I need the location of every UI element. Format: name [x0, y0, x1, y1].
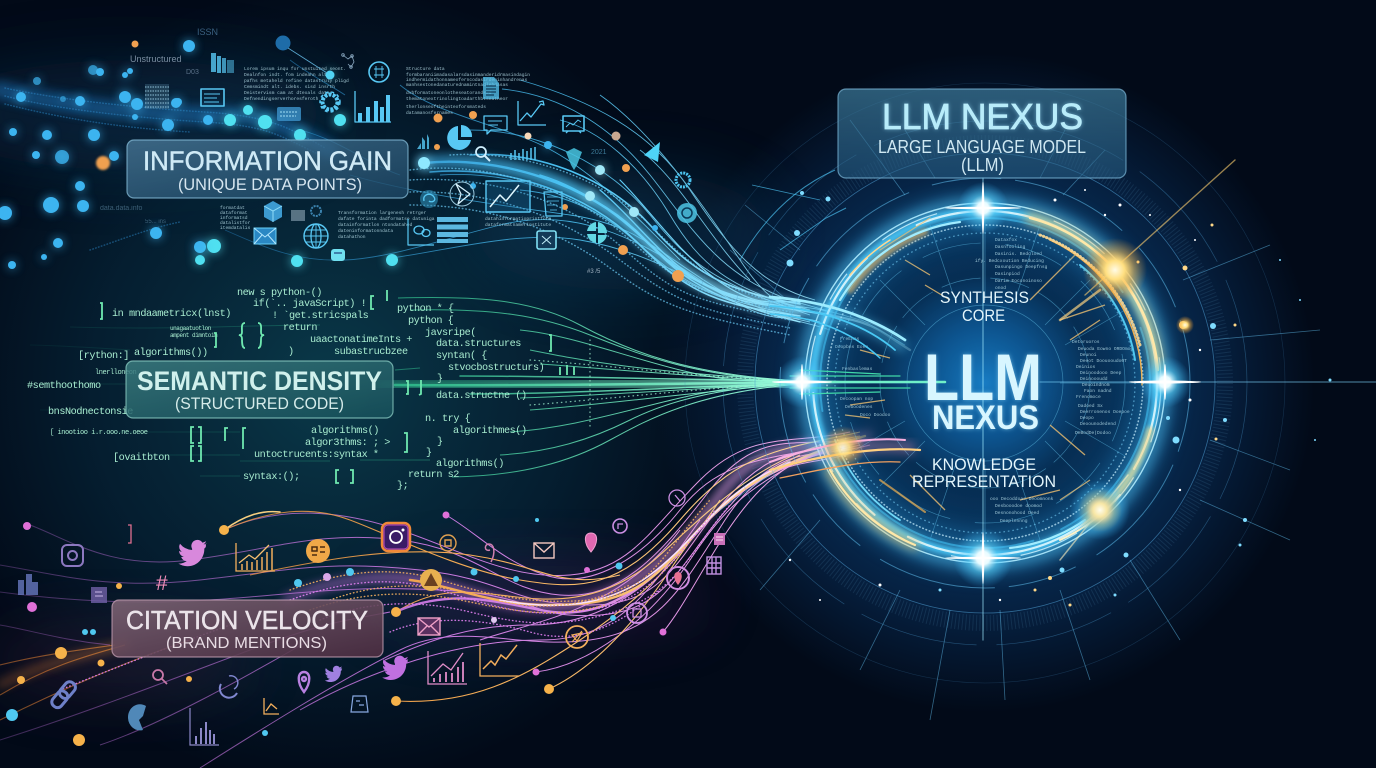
- nexus: inner micro data: Fenbaslemas: [842, 366, 873, 372]
- nexus: inner gold streaks: [845, 255, 1105, 510]
- code fragments: in mndaametricx(lnst): [112, 308, 231, 320]
- icon: column chart: [211, 53, 234, 73]
- icons: citation cluster: [18, 490, 725, 745]
- icon: orange ring: [566, 626, 588, 648]
- information gain text blocks: Cemsmindt alt. idebs. sisd insrth: [244, 84, 335, 90]
- information gain text blocks: datainformatlon ntondatahed: [338, 222, 413, 228]
- nexus: inner micro data: Deoounodedend: [1080, 421, 1116, 427]
- information gain text blocks: dvbformatoneonlotheseatorandsed: [406, 90, 492, 96]
- icon: document: [483, 77, 499, 99]
- label: llm core title: NEXUS: [932, 399, 1039, 437]
- information gain micro labels: 55... ins: [145, 219, 166, 225]
- nexus: inner micro data: Dadoed Sx: [1078, 403, 1103, 409]
- icon: mini bars left: [417, 134, 429, 149]
- icon: blue bullet: [128, 704, 146, 730]
- icon: twitter bird: [178, 540, 207, 566]
- nexus: inner micro data: Doopbns Eoen: [835, 344, 868, 350]
- heading: semantic density: SEMANTIC DENSITY: [137, 366, 382, 396]
- subheading: unique data points: (UNIQUE DATA POINTS): [178, 175, 362, 194]
- nexus: flare stars: [772, 182, 1201, 588]
- icon: small bar chart: [190, 708, 219, 745]
- information gain text blocks: indhermidathonnameoferncodasirdeninhandrenas: [406, 77, 528, 83]
- nexus: inner micro data: Darim Eoconoinoso: [995, 278, 1042, 284]
- heading: information gain: INFORMATION GAIN: [143, 146, 392, 176]
- information gain micro labels: #3 /5: [587, 269, 601, 275]
- panel: citation velocity: [112, 600, 383, 657]
- code fragments: n. try {: [425, 413, 471, 425]
- code fragments: [27, 287, 544, 492]
- nexus: centre glow: [810, 208, 1160, 558]
- nexus: inner micro data: ooo Decoddoas Deoomnonk: [990, 496, 1054, 502]
- code fragments: [rython:]: [78, 350, 129, 362]
- code fragments: algor3thms: ; >: [305, 437, 390, 449]
- code fragments: lnerlloneon: [95, 369, 137, 377]
- icon: doc tile: [714, 533, 725, 545]
- information gain text blocks: Dealnfon indt. fom indeahn alt: [244, 72, 327, 78]
- information gain micro labels: Unstructured: [130, 54, 182, 64]
- code fragments: bnsNodnectonsie: [48, 406, 133, 418]
- information gain text blocks: itemdatalis: [220, 225, 251, 231]
- icon: bubble ring: [669, 490, 685, 506]
- information gain text blocks: informatsd: [220, 215, 248, 221]
- icon: purple ring: [627, 603, 647, 623]
- nexus: inner micro data: Dasinpiod: [995, 271, 1020, 277]
- nexus: inner micro data: Dasunpingo Deepfnsg: [995, 264, 1048, 270]
- nexus: inner radial rays: [820, 215, 1150, 550]
- nexus: inner micro data: Dataxfox: [995, 237, 1017, 243]
- subheading: structured code: (STRUCTURED CODE): [175, 394, 344, 413]
- icon: pie two: [587, 222, 607, 244]
- information gain text blocks: dafate forinta dadformatse datuniga: [338, 216, 435, 222]
- icon: hash: #: [156, 572, 168, 595]
- icon: mini bars: [511, 147, 535, 160]
- code fragments: ampent dimntoin: [170, 332, 218, 339]
- nexus: inner micro data: Detoruoros: [1072, 339, 1100, 345]
- icon: bar chart: [355, 91, 391, 122]
- code fragments: python {: [408, 315, 454, 327]
- stream: semantic density (green): [30, 297, 830, 477]
- code fragments: algorithms()): [134, 347, 208, 359]
- subheading: large language model: LARGE LANGUAGE MODEL: [878, 137, 1086, 157]
- nexus: main ring: [805, 203, 1165, 563]
- code fragments: unagaatuotlon: [170, 325, 212, 332]
- icon: pixel grid: [145, 84, 169, 109]
- icon: chain link: [50, 680, 77, 710]
- panel: information gain: [127, 140, 408, 198]
- stream: citation velocity (magenta and orange): [0, 432, 870, 768]
- nexus: inner micro data: Decoopan nop: [840, 396, 873, 402]
- nexus: inner micro data: Dasnfooling: [995, 244, 1026, 250]
- icon: envelope lower: [418, 618, 440, 635]
- nexus: stream entries inside ring: [770, 297, 945, 478]
- information gain text blocks: formbaraniimadasalarsdasinmanderidrmasindagin: [406, 72, 530, 78]
- icon: framed chart: [486, 181, 530, 212]
- icon: brain circle: [420, 190, 438, 208]
- icon: pin ring: [667, 567, 689, 589]
- icon: small tile left: [91, 587, 107, 603]
- information gain text blocks: Lorem ipsum inqu for unstuited seont.: [244, 66, 346, 72]
- icon: instagram outline: [62, 545, 83, 566]
- panel: semantic density: [126, 361, 393, 418]
- icon: twitter small: [325, 666, 342, 682]
- information gain text blocks: dateninformatonndata: [338, 228, 393, 234]
- icon: envelope magenta: [534, 543, 554, 558]
- icon: hook: [485, 544, 494, 562]
- nexus: inner micro data: Deuoindnom: [1082, 382, 1110, 388]
- code fragments: }: [437, 436, 443, 448]
- icons: information gain cluster: [145, 36, 697, 261]
- code fragments: return s2: [408, 470, 459, 481]
- code fragments: }: [437, 373, 443, 385]
- code fragments: uaactonatimeInts +: [310, 334, 412, 346]
- information gain text blocks: pafhs metaheld refine datastruly pligd: [244, 78, 349, 84]
- information gain micro labels: D03: [186, 69, 199, 76]
- nexus: inner micro data: Desnonohood Deed: [995, 510, 1039, 516]
- nexus: flare beams: [983, 160, 1376, 640]
- label: llm core title: [924, 340, 1042, 437]
- icon: ring badge: [440, 535, 456, 551]
- code fragments: subastrucbzee: [334, 346, 408, 358]
- icon: list bars: [437, 217, 468, 243]
- nexus: inner micro data: Dasinis. Bedcloed: [995, 251, 1042, 257]
- icon: network globe: [369, 62, 389, 82]
- nexus: sparkles: [786, 189, 1332, 606]
- label: synthesis core: [940, 288, 1029, 325]
- icon: orange badge: [306, 539, 330, 563]
- nexus: outer technical rings: [685, 83, 1320, 720]
- label: knowledge representation: KNOWLEDGE: [932, 455, 1036, 474]
- code fragments: javsripe(: [425, 327, 476, 339]
- code fragments: #semthoothomo: [27, 380, 101, 392]
- information gain text blocks: datahathon: [338, 234, 366, 240]
- icon: report page: [544, 192, 562, 216]
- icon: monitor document: [201, 89, 224, 106]
- nexus: inner micro data: [835, 237, 1133, 524]
- citation nodes: [6, 512, 666, 746]
- nexus: inner micro data: Deerronenos Doepoe: [1080, 409, 1130, 415]
- icon: line chart: [518, 101, 546, 125]
- information gain text blocks: datahinformatioprintform: [485, 216, 551, 222]
- nexus: inner micro data: onod: [995, 285, 1006, 291]
- nexus: inner micro data: Deinios: [1076, 364, 1096, 370]
- code fragments: ): [288, 346, 294, 358]
- information gain text blocks: manhsestonedanaturednamintnadlehdasas: [406, 82, 508, 88]
- icon: gem: [566, 148, 582, 170]
- icon: instagram colored: [382, 523, 410, 551]
- heading: citation velocity: CITATION VELOCITY: [126, 605, 368, 635]
- icon: round badge: [677, 203, 697, 223]
- code fragments: algorithmes(): [453, 425, 527, 437]
- icon: cube: [264, 201, 282, 222]
- nexus: inner micro data: FreEnos: [840, 336, 860, 342]
- code fragments: [ inootioo i.r.ooo.ne.oeoe: [50, 429, 148, 437]
- icon: speech bubble: [484, 116, 507, 134]
- icon: card chart: [277, 107, 301, 121]
- nexus: inner micro data: Deuoda Eowno ORDOmoe: [1078, 346, 1133, 352]
- code fragments: new s python-(): [237, 287, 322, 299]
- information gain text blocks: datalistfor: [220, 220, 251, 226]
- nexus: inner micro data: Deeplennng: [1000, 518, 1028, 524]
- icon: orange growth chart: [236, 543, 275, 571]
- code fragments: algorithms(): [436, 458, 504, 470]
- icon: bracket tag: [128, 525, 131, 543]
- icon: node link: [276, 36, 334, 80]
- nexus: inner micro data: Doco Doodoo: [860, 412, 891, 418]
- icon: tent badge: [420, 569, 442, 591]
- icon: gear: [320, 92, 340, 112]
- label: llm core title: LLM: [924, 340, 1042, 414]
- nexus: inner micro data: Deinoooudd: [1080, 376, 1108, 382]
- information gain micro labels: ISSN: [197, 27, 218, 37]
- code fragments: untoctrucents:syntax *: [254, 449, 379, 461]
- information gain text blocks: datamanosfernames: [406, 110, 453, 116]
- information gain text blocks: Deistervism cam at dtexals datas: [244, 90, 332, 96]
- code fragments: if(`.. javaScript) !: [253, 297, 366, 310]
- icon: play circle: [450, 182, 474, 206]
- icon: hex badge: [676, 173, 690, 187]
- code fragments: };: [397, 480, 408, 492]
- ring: gold arcs: [830, 218, 1158, 545]
- icon: spiral ring: [613, 519, 627, 533]
- icon: envelope: [254, 228, 276, 244]
- nexus: inner micro data: Deinoodooo Deep: [1080, 370, 1122, 376]
- icon: orange mini chart: [264, 698, 279, 714]
- icon: small molecule: [342, 54, 354, 68]
- nexus: inner micro data: Deboodenes: [845, 404, 873, 410]
- code fragments: python * {: [397, 303, 454, 315]
- icon: chat frame: [408, 219, 434, 245]
- icon: small mail chip: [331, 249, 345, 261]
- blue data dots: [0, 40, 658, 269]
- information gain text blocks: Structure data: [406, 66, 445, 72]
- icon: mini flow: [351, 696, 368, 712]
- information gain text blocks: formatdat: [220, 205, 245, 211]
- label: knowledge representation: [912, 455, 1056, 491]
- code fragments: data.structne (): [436, 390, 527, 402]
- nexus: inner micro data: DeBodDe(Dodoo: [1075, 430, 1111, 436]
- icon: pin purple: [299, 672, 309, 692]
- icon: purple chart: [428, 651, 467, 684]
- icon: twitter lower: [382, 656, 409, 680]
- icon: orange line chart: [480, 643, 519, 676]
- icon: magnifier: [476, 147, 490, 161]
- icon: arrow cursor: [644, 142, 660, 162]
- information gain text blocks: [220, 66, 551, 240]
- nexus: inner micro data: ify. Bedcxoution Beducing: [975, 258, 1044, 264]
- information gain text blocks: dataformatnamerinstitute: [485, 222, 551, 228]
- information gain micro labels: data.data.info: [100, 205, 143, 212]
- code fragments: stvocbostructurs): [448, 362, 544, 374]
- icon: small tile: [291, 210, 305, 221]
- code fragments: syntax:();: [243, 471, 300, 483]
- icon: pie chart: [447, 125, 472, 150]
- icon: monitor chart: [563, 116, 584, 133]
- subheading: llm abbreviation: (LLM): [961, 155, 1004, 175]
- information gain micro labels: [100, 27, 607, 275]
- nexus: inner micro data: Deunoi: [1080, 352, 1097, 358]
- nexus: inner micro data: Deopo: [1080, 415, 1094, 421]
- code fragments: ! `get.stricspals: [272, 309, 369, 322]
- ring: cyan inner arcs: [835, 222, 1135, 548]
- information gain text blocks: Defnendingserverhoresferoth: [244, 96, 319, 102]
- information gain text blocks: Transformation largenesh retrger: [338, 210, 426, 216]
- information gain text blocks: therlonseoftheinteoforsmateds: [406, 104, 486, 110]
- panel: llm nexus title: [838, 89, 1126, 178]
- icon: grid tile: [707, 557, 721, 574]
- nexus: inner micro data: Desbooodoe doomod: [995, 503, 1042, 509]
- subheading: brand mentions: (BRAND MENTIONS): [166, 635, 327, 652]
- icon: map pin: [585, 533, 597, 552]
- stream: information gain (blue): [0, 60, 910, 350]
- code fragments: algorithms(): [311, 425, 379, 437]
- information gain text blocks: thematonextrinolingtoadarthbtseatheor: [406, 96, 508, 102]
- information gain micro labels: 2021: [591, 149, 607, 156]
- code fragments: }: [426, 447, 432, 459]
- label: knowledge representation: REPRESENTATION: [912, 472, 1056, 491]
- icon: search: [153, 670, 167, 684]
- code brackets: [100, 290, 574, 483]
- code fragments: return: [283, 323, 317, 334]
- orange data dots: [96, 40, 684, 282]
- heading: llm nexus: LLM NEXUS: [882, 96, 1083, 137]
- icon: swirl badge: [220, 676, 238, 698]
- code fragments: syntan( {: [436, 350, 487, 362]
- label: synthesis core: CORE: [962, 306, 1005, 325]
- nexus: inner micro data: Deeot Doouooudo0T: [1080, 358, 1127, 364]
- information gain text blocks: dataformat: [220, 210, 248, 216]
- nexus: inner micro data: Frenomoce: [1076, 394, 1101, 400]
- icon: mini circuit: [311, 206, 321, 216]
- nexus: centre labels: [912, 288, 1056, 491]
- code fragments: data.structures: [436, 338, 521, 350]
- icon: square badge: [537, 231, 556, 249]
- nexus: inner micro data: Faon nadnd: [1084, 388, 1112, 394]
- icon: bars left: [18, 574, 38, 595]
- label: synthesis core: SYNTHESIS: [940, 288, 1029, 307]
- icon: globe: [304, 224, 328, 248]
- code fragments: [ovaitbton: [113, 452, 170, 464]
